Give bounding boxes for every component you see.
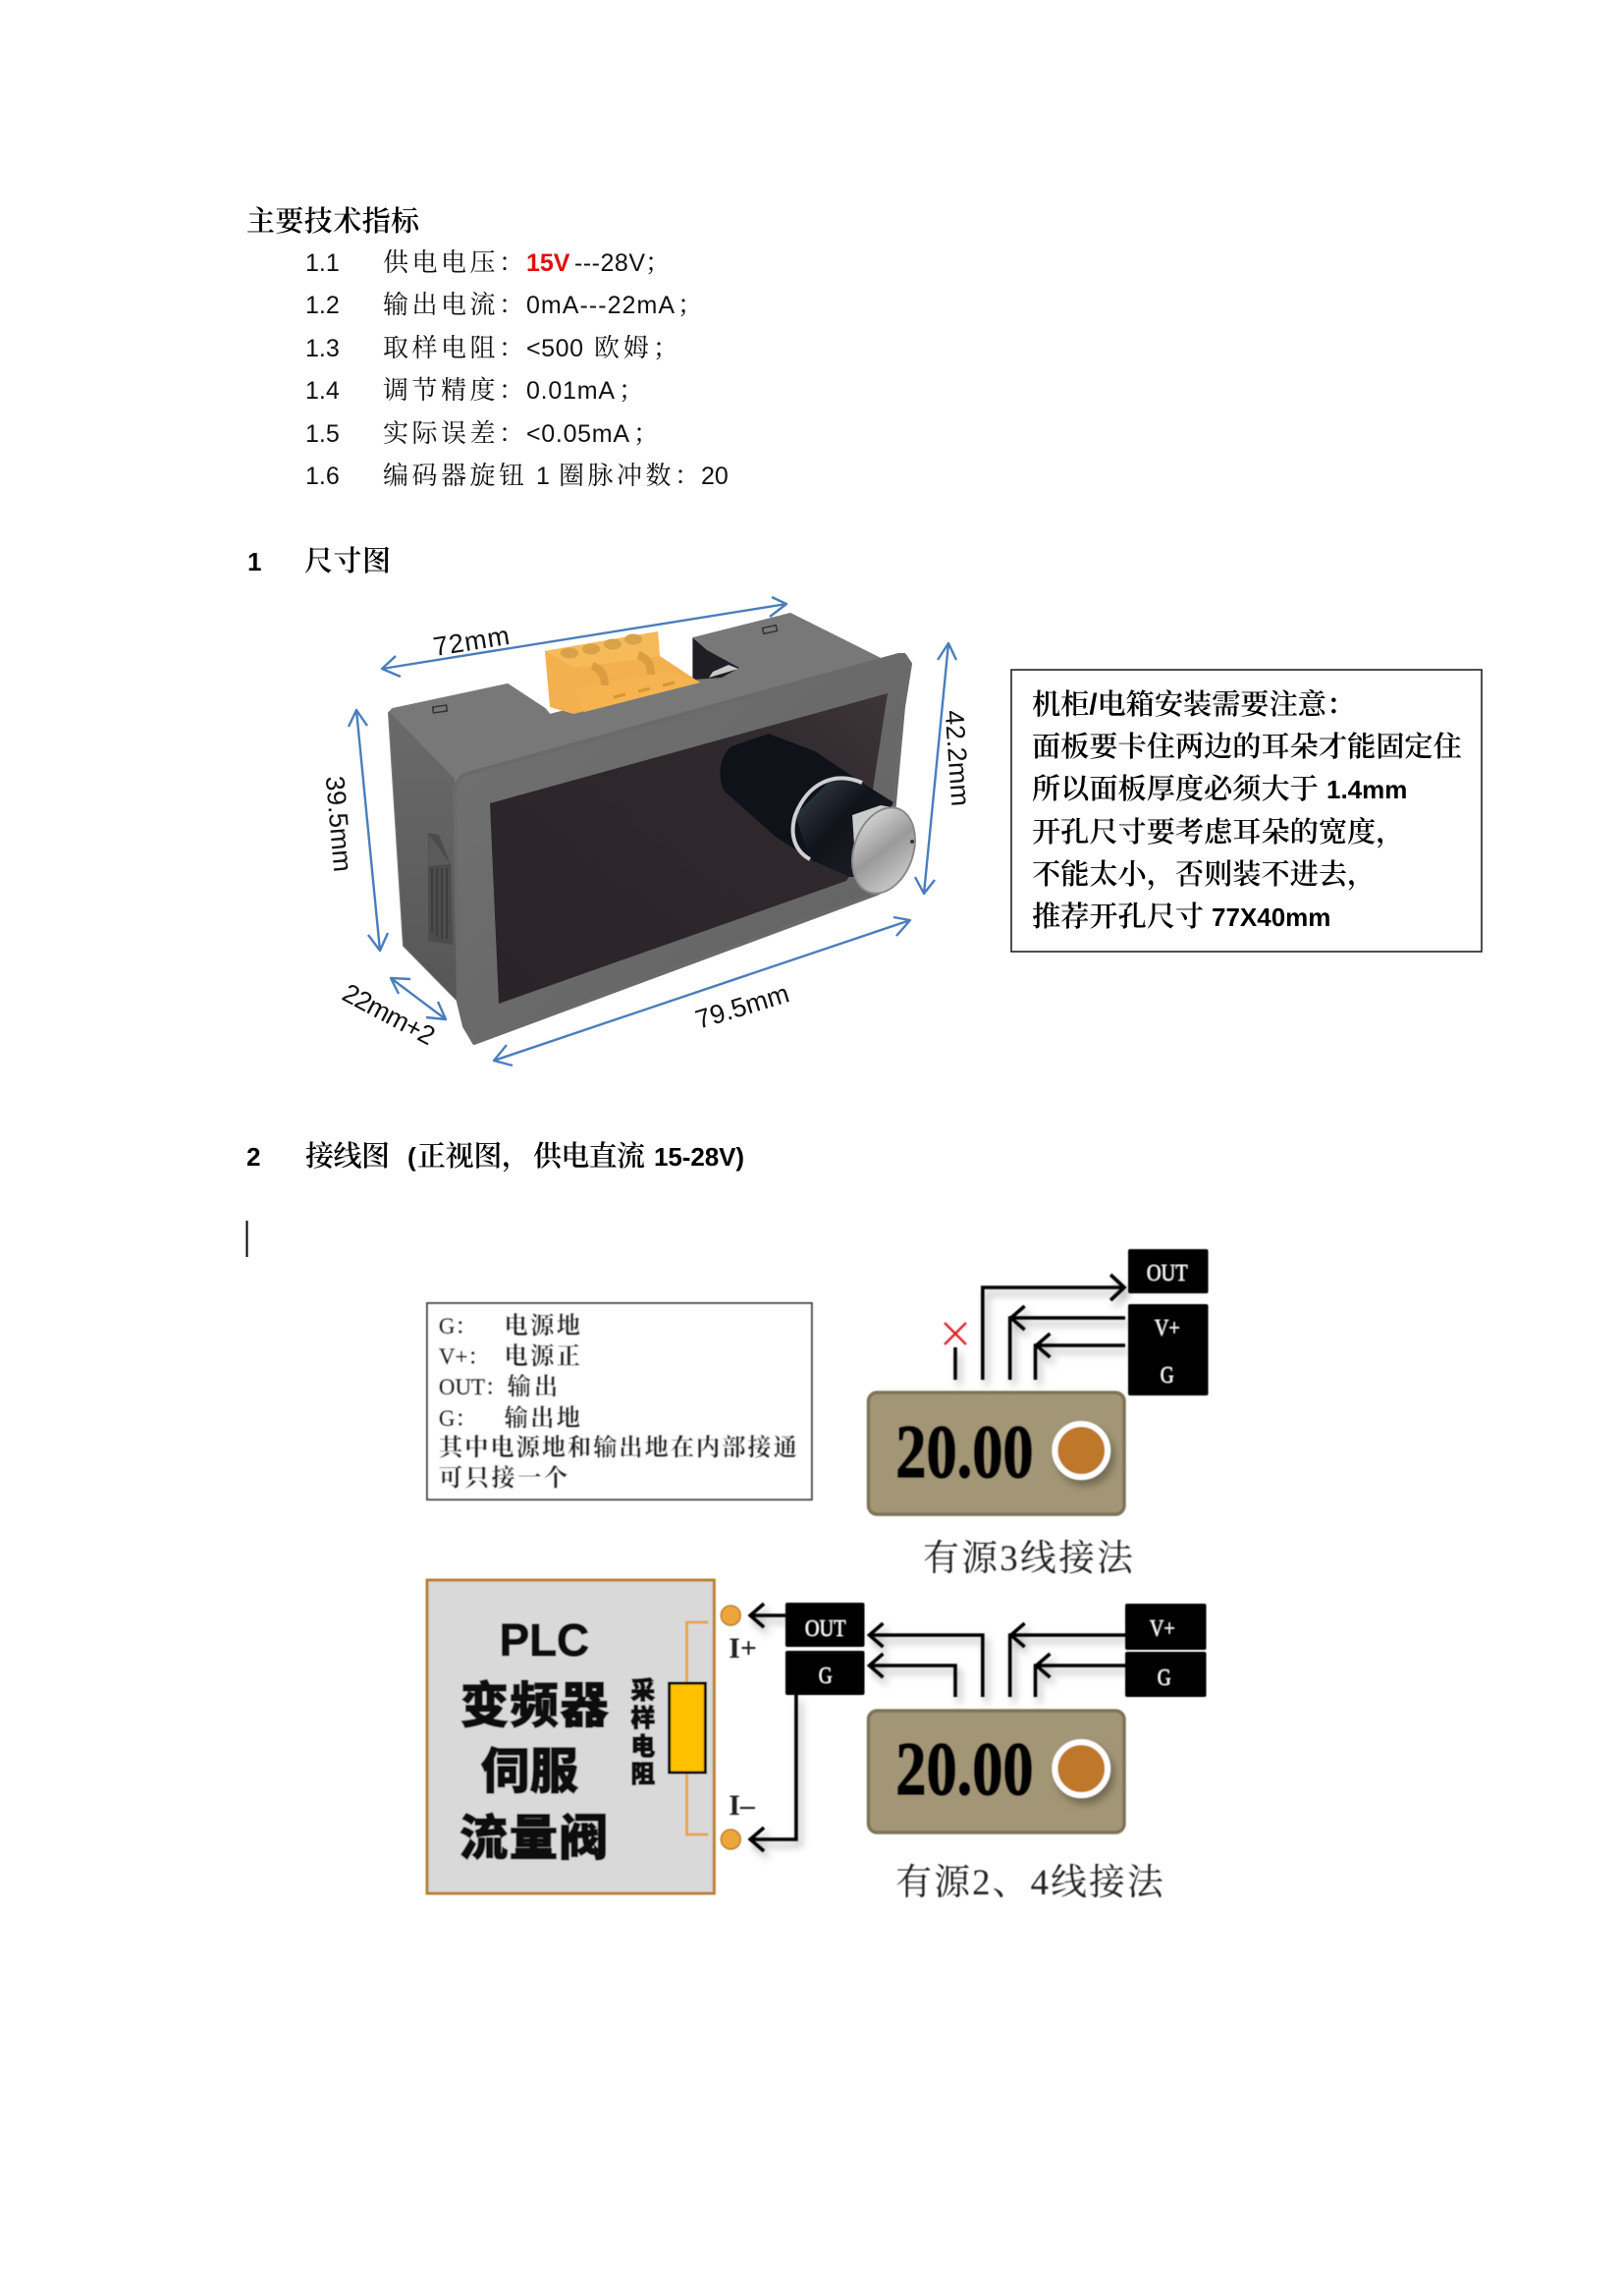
spec 1.1 [305,243,671,279]
panel: PLC device [427,1580,714,1893]
spec 1.6: 1.6 [305,463,340,490]
spec 1.3: <500 [526,335,583,362]
spec 1.4: 0.01mA [526,377,615,405]
spec 1.5: 1.5 [305,420,340,448]
spec 1.2: ； [677,285,703,321]
spec 1.4: 调节精度： [383,375,524,405]
3-wire: display meter [868,1393,1124,1514]
spec 1.3 [305,333,678,362]
4-wire: output terminal blocks: OUT [805,1616,846,1642]
heading: section 2 wiring diagram [246,1140,744,1173]
heading: section 2 wiring diagram: 供电直流 [533,1140,645,1173]
spec 1.2: 1.2 [305,292,340,319]
legend box: 电源正 [505,1343,580,1370]
legend box: 输出地 [505,1405,580,1432]
4-wire: power terminal blocks [1125,1604,1207,1697]
4-wire: power terminal blocks: G [1158,1666,1171,1691]
spec 1.2 [305,285,703,321]
callout: cabinet installation notes: 面板要卡住两边的耳朵才能固定住 [1032,731,1462,763]
sampling resistor label: 电 [630,1733,655,1761]
terminal: I+ [721,1606,757,1665]
spec 1.1: 1.1 [305,249,340,277]
spec 1.6: 1 [536,463,550,490]
heading: section 1 dimension drawing: 1 [247,547,261,576]
4-wire: display meter [868,1711,1124,1832]
callout: cabinet installation notes: 1.4mm [1326,775,1407,804]
panel: PLC device: 伺服 [481,1744,578,1799]
legend box: OUT： [439,1375,508,1399]
orange terminal connector [545,631,700,714]
3-wire: wires and arrows [955,1275,1125,1380]
spec 1.3: 1.3 [305,335,340,362]
display window [490,693,888,1004]
legend box: 电源地 [505,1313,580,1339]
callout: cabinet installation notes: 不能太小，否则装不进去， [1032,858,1376,892]
spec 1.3: 欧姆； [594,333,678,362]
caption: 2/4-wire: 有源2、4线接法 [895,1862,1164,1902]
4-wire: output terminal blocks: G [819,1664,833,1689]
3-wire: terminal blocks: G [1161,1363,1174,1389]
legend box: G： [439,1314,477,1339]
label: 72mm: 72mm [431,621,512,662]
4-wire: display meter: 20.00 [895,1727,1034,1811]
spec 1.3: 取样电阻： [383,333,524,362]
red cross: unused terminal [945,1323,966,1344]
4-wire: output terminal blocks [785,1603,864,1695]
callout: cabinet installation notes: 所以面板厚度必须大于 [1032,773,1319,805]
spec 1.5 [305,413,659,450]
arrow: 42.2mm height [915,643,956,894]
spec 1.4: ； [619,370,644,407]
callout: cabinet installation notes: 机柜/电箱安装需要注意： [1032,687,1355,721]
3-wire: display meter: 20.00 [895,1410,1034,1494]
spec 1.4 [305,370,644,407]
spec 1.4: 1.4 [305,377,340,405]
legend box: 可只接一个 [439,1465,568,1492]
legend box: V+： [439,1344,490,1369]
heading: section 2 wiring diagram: 正视图， [417,1140,530,1173]
spec 1.6: 编码器旋钮 [383,461,524,490]
side latch [428,833,453,945]
spec 1.5: <0.05mA [526,420,629,448]
legend box [427,1303,812,1500]
3-wire: terminal blocks: OUT [1147,1261,1188,1286]
spec 1.5: 实际误差： [383,418,524,448]
legend box: G： [439,1406,477,1431]
heading: main specs: 主要技术指标 [246,205,421,238]
panel: PLC device: PLC [500,1614,589,1666]
callout: cabinet installation notes: 77X40mm [1212,902,1330,932]
spec 1.1: 供电电压： [383,247,524,277]
spec 1.6: 20 [701,463,729,490]
spec 1.6 [305,461,729,490]
sampling resistor [670,1622,708,1834]
sampling resistor label: 采 [630,1677,655,1705]
spec 1.1: 15V [526,249,570,277]
arrow: 79.5mm width [494,917,910,1066]
4-wire: power terminal blocks: V+ [1150,1616,1175,1642]
callout: cabinet installation notes [1011,670,1482,952]
wiring diagrams [427,1249,1209,1902]
front bezel [455,655,910,1043]
sampling resistor label: 阻 [630,1761,655,1788]
panel: PLC device: 变频器 [460,1678,609,1733]
text cursor [245,1221,247,1257]
product photo with dimensions [320,597,975,1066]
3-wire: terminal blocks: V+ [1155,1316,1180,1341]
arrow: 22mm depth [391,978,446,1019]
spec list [305,243,729,490]
terminal: I- [721,1789,756,1849]
arrow: 72mm width [382,597,786,677]
label: 42.2mm: 42.2mm [940,709,975,807]
spec 1.2: 0mA---22mA [526,292,675,319]
sampling resistor label [630,1677,655,1788]
4-wire: wires and arrows [750,1604,1125,1851]
heading: section 2 wiring diagram: 接线图 [305,1140,390,1173]
heading: section 2 wiring diagram: 2 [246,1142,260,1172]
spec 1.5: ； [633,413,659,450]
label: 79.5mm: 79.5mm [692,978,792,1035]
arrow: 39.5mm height [349,710,388,951]
caption: 3-wire: 有源3线接法 [923,1538,1134,1578]
heading: section 1 dimension drawing: 尺寸图 [304,545,391,577]
sampling resistor label: 样 [630,1705,655,1732]
callout: cabinet installation notes: 推荐开孔尺寸 [1032,901,1204,933]
terminal: I-: I– [729,1789,756,1822]
heading: section 2 wiring diagram: 15-28V) [654,1142,744,1172]
encoder knob [720,734,926,902]
legend box: 其中电源地和输出地在内部接通 [439,1435,797,1461]
module housing [389,614,898,1002]
spec 1.2: 输出电流： [383,290,524,319]
label: 22mm+2: 22mm+2 [338,978,440,1051]
spec 1.1: ---28V [574,249,645,277]
label: 39.5mm: 39.5mm [320,775,357,873]
spec 1.6: 圈脉冲数： [559,461,700,490]
spec 1.1: ； [645,243,671,279]
terminal: I+: I+ [729,1632,757,1665]
heading: section 2 wiring diagram: ( [407,1142,416,1172]
callout: cabinet installation notes: 开孔尺寸要考虑耳朵的宽度， [1032,816,1404,849]
legend box: 输出 [508,1374,558,1400]
heading: section 1 dimension drawing [247,545,391,577]
3-wire: terminal blocks [1128,1249,1209,1395]
panel: PLC device: 流量阀 [460,1811,608,1866]
